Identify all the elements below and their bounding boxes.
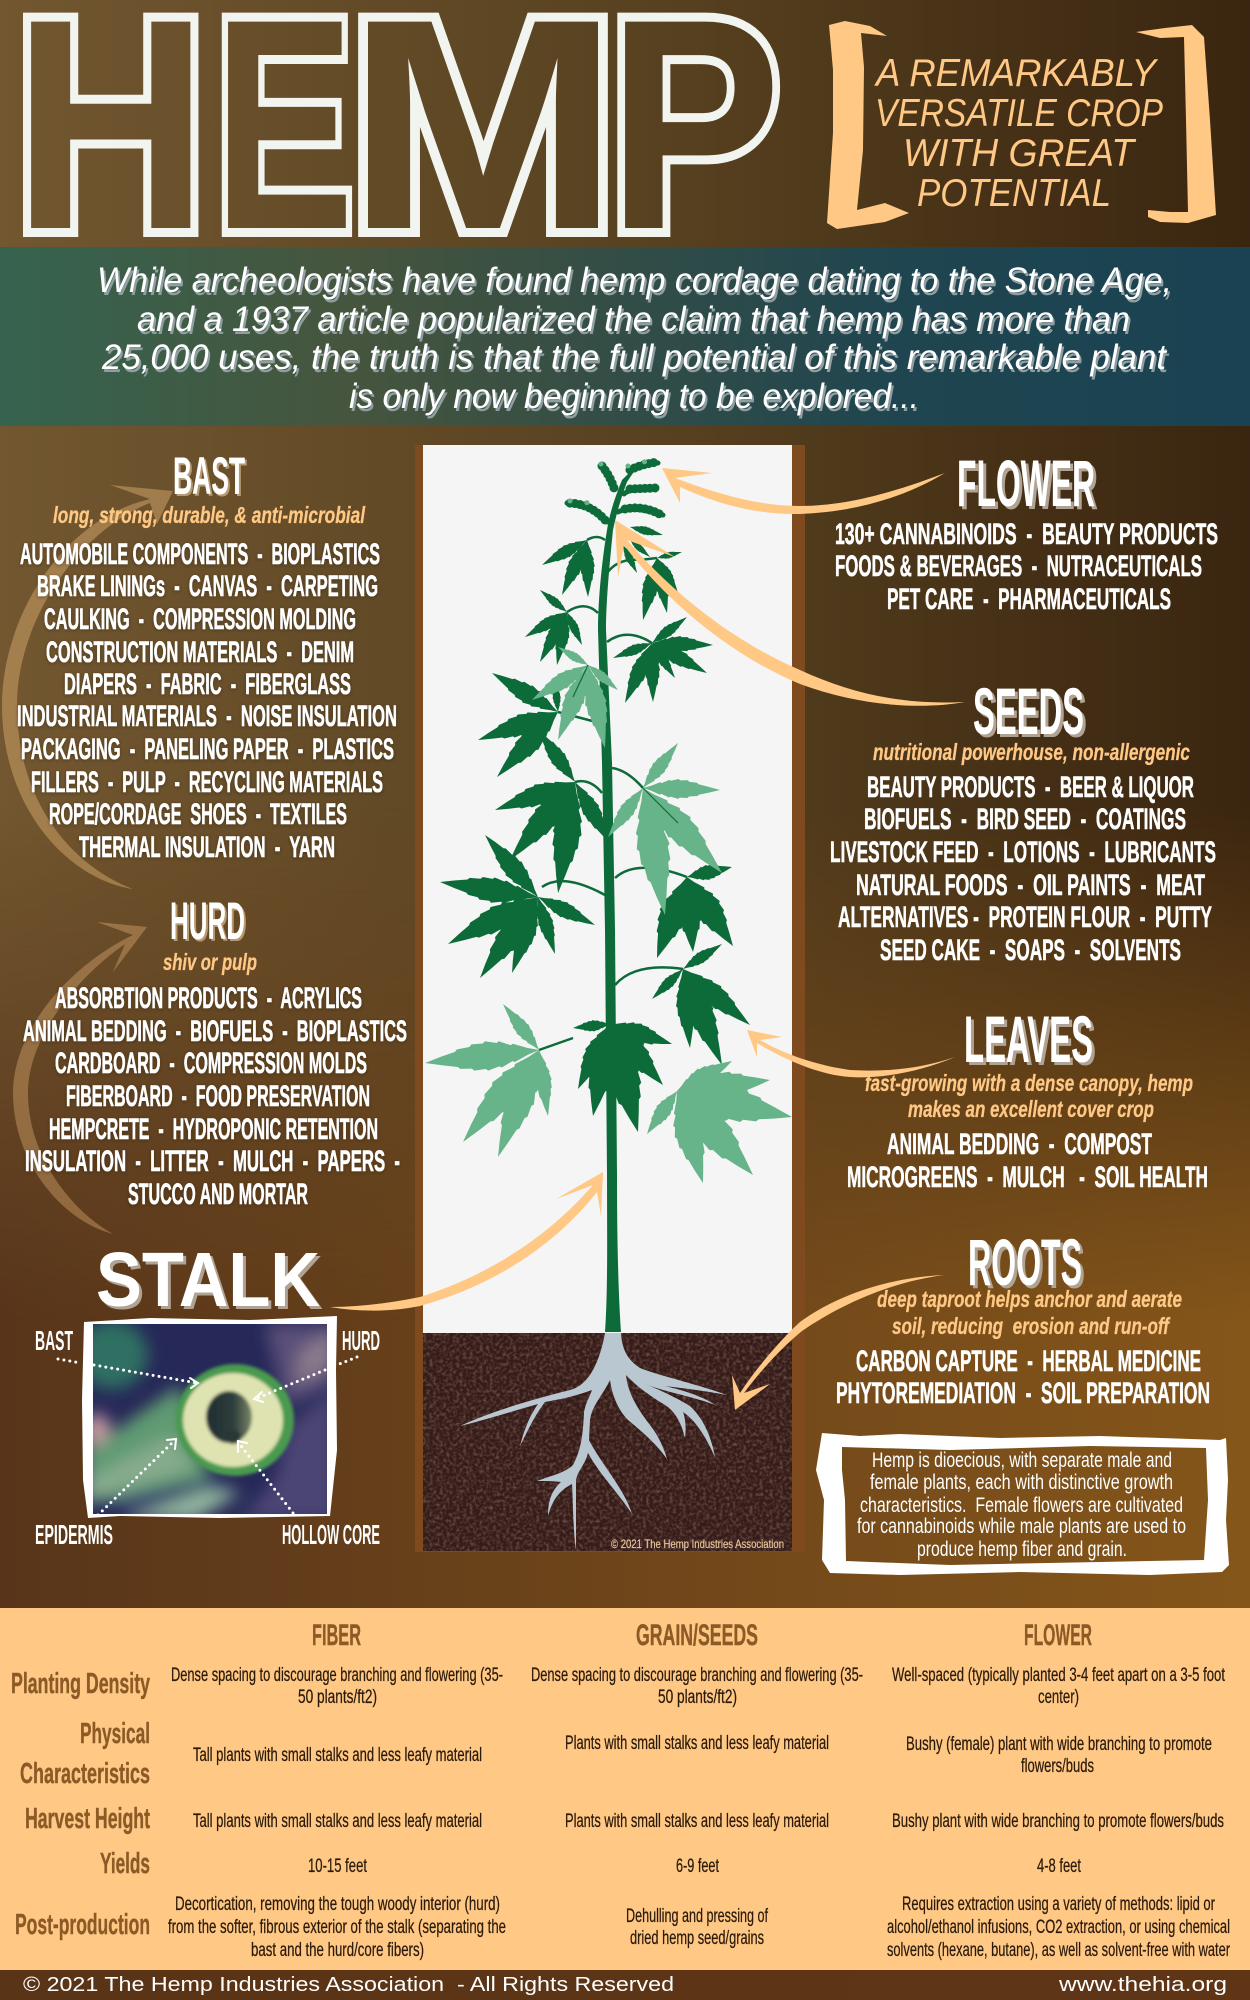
list: hurd uses: ANIMAL BEDDING - BIOFUELS - BIOPLASTICS (23, 1015, 407, 1048)
subtitle: roots (877, 1286, 1182, 1339)
stalk cross-section photo (93, 1324, 327, 1514)
footer bar (0, 1970, 1250, 2000)
arrow: hurd curve (13, 922, 147, 1234)
tagline: WITH GREAT (903, 132, 1137, 175)
panel: intro band (0, 247, 1250, 426)
list: flower uses (835, 518, 1218, 616)
intro text: While archeologists have found hemp cordage dating to the Stone Age, (97, 261, 1172, 300)
plant illustration (423, 460, 796, 1332)
tagline: POTENTIAL (917, 172, 1111, 215)
table row labels: Post-production (15, 1909, 150, 1941)
text: BAST (35, 1325, 73, 1356)
label: epidermis: EPIDERMIS (35, 1519, 113, 1550)
roots (460, 1333, 727, 1550)
table column: flower: 4-8 feet (1037, 1856, 1081, 1877)
table column: fiber: from the softer, fibrous exterior of the stalk (separating the (168, 1917, 506, 1938)
table column: fiber: Dense spacing to discourage branching and flowering (35- (171, 1665, 503, 1686)
list: hurd uses: HEMPCRETE - HYDROPONIC RETENTION (49, 1113, 378, 1146)
stalk photo frame (82, 1316, 337, 1518)
text: FLOWER (957, 446, 1095, 520)
table column: grain and seeds: 50 plants/ft2) (658, 1687, 737, 1708)
lower dark leaf on the stem (573, 1020, 672, 1132)
list: bast uses: FILLERS - PULP - RECYCLING MATERIALS (31, 766, 383, 799)
soil copyright: © 2021 The Hemp Industries Association (611, 1537, 784, 1551)
tagline: A REMARKABLY (874, 52, 1159, 95)
text: SEEDS (973, 674, 1084, 748)
table column: grain and seeds (531, 1665, 863, 1949)
list: bast uses: ROPE/CORDAGE SHOES - TEXTILES (49, 798, 347, 831)
subtitle: leaves (865, 1070, 1193, 1122)
list: bast uses: THERMAL INSULATION - YARN (79, 831, 335, 864)
heading: stalk: STALK (96, 1237, 320, 1323)
list: hurd uses: STUCCO AND MORTAR (128, 1178, 308, 1211)
list: bast uses: CAULKING - COMPRESSION MOLDING (44, 603, 356, 636)
table column headers: FIBER (312, 1619, 361, 1652)
table column: grain and seeds: Dense spacing to discourage branching and flowering (35- (531, 1665, 863, 1686)
list: bast uses: DIAPERS - FABRIC - FIBERGLASS (64, 668, 351, 701)
table row labels (11, 1668, 150, 1941)
tagline: VERSATILE CROP (875, 92, 1163, 135)
callout: dioecious note (816, 1433, 1229, 1575)
list: bast uses: AUTOMOBILE COMPONENTS - BIOPLASTICS (20, 538, 380, 571)
table column: fiber: 50 plants/ft2) (298, 1687, 377, 1708)
table column headers: GRAIN/SEEDS (636, 1619, 758, 1652)
table column: fiber: bast and the hurd/core fibers) (251, 1940, 424, 1961)
subtitle: hurd: shiv or pulp (163, 949, 257, 975)
table row labels: Characteristics (20, 1758, 150, 1790)
stalk pointers (58, 1357, 357, 1515)
callout: dioecious note: produce hemp fiber and grain. (917, 1538, 1127, 1561)
table column: flower: flowers/buds (1021, 1756, 1094, 1777)
light leaves (423, 643, 733, 1162)
list: hurd uses: CARDBOARD - COMPRESSION MOLDS (55, 1047, 367, 1080)
arrow: leaves (747, 1030, 955, 1077)
table column: grain and seeds: dried hemp seed/grains (630, 1928, 764, 1949)
list: bast uses: PACKAGING - PANELING PAPER - PLASTICS (21, 733, 394, 766)
subtitle: bast: long, strong, durable, & anti-microbial (53, 502, 365, 528)
arrow: stalk (330, 1172, 603, 1311)
text: LEAVES (964, 1002, 1093, 1076)
list: seeds uses (830, 771, 1216, 967)
table row labels: Planting Density (11, 1668, 150, 1700)
list: hurd uses: ABSORBTION PRODUCTS - ACRYLICS (55, 982, 362, 1015)
tagline (874, 52, 1163, 215)
text: HURD (342, 1325, 380, 1356)
flower buds (567, 460, 663, 522)
list: hurd uses: INSULATION - LITTER - MULCH - PAPERS - (25, 1145, 400, 1178)
intro text: and a 1937 article popularized the claim that hemp has more than (137, 300, 1130, 339)
table column headers: FLOWER (1024, 1619, 1092, 1652)
list: leaves uses (847, 1128, 1208, 1194)
title: HEMP (13, 0, 781, 292)
table column: grain and seeds: 6-9 feet (676, 1856, 719, 1877)
intro text: 25,000 uses, the truth is that the full potential of this remarkable plant (101, 338, 1167, 377)
arrow: seeds (615, 520, 965, 706)
bracket: right (1136, 25, 1216, 223)
subtitle: leaves: makes an excellent cover crop (908, 1096, 1154, 1122)
list: bast uses: BRAKE LININGs - CANVAS - CARPETING (37, 570, 378, 603)
dark leaves (438, 523, 757, 1070)
table column: flower (887, 1665, 1230, 1961)
intro text: is only now beginning to be explored... (349, 377, 919, 416)
table column: fiber: Tall plants with small stalks and less leafy material (193, 1811, 482, 1832)
text: BAST (173, 447, 245, 506)
footer bar: © 2021 The Hemp Industries Association - All Rights Reserved (23, 1974, 674, 1996)
table column: grain and seeds: Plants with small stalks and less leafy material (565, 1811, 829, 1832)
table column: fiber: 10-15 feet (308, 1856, 367, 1877)
soil (423, 1333, 792, 1551)
stems of leaves (539, 537, 687, 1050)
table column: fiber: Decortication, removing the tough woody interior (hurd) (175, 1894, 500, 1915)
arrow: roots (732, 1275, 944, 1410)
table column: grain and seeds: Dehulling and pressing of (626, 1906, 768, 1927)
text: HURD (170, 892, 245, 951)
footer bar: www.thehia.org (1058, 1974, 1227, 1996)
table column: grain and seeds: Plants with small stalks and less leafy material (565, 1733, 829, 1754)
bracket: left (827, 21, 909, 229)
list: hurd uses (23, 982, 407, 1211)
table row labels: Yields (100, 1848, 150, 1880)
panel: plant frame (415, 445, 805, 1552)
table column headers (312, 1619, 1092, 1652)
table column: fiber: Tall plants with small stalks and less leafy material (193, 1745, 482, 1766)
light leaf on the right (647, 1061, 792, 1183)
text: HOLLOW CORE (282, 1519, 380, 1550)
arrow: flower (662, 468, 945, 514)
table column: flower: center) (1038, 1687, 1079, 1708)
table row labels: Physical (80, 1718, 150, 1750)
main stem (598, 471, 633, 1332)
panel: comparison table (0, 1608, 1250, 1970)
leaf veins (573, 665, 678, 823)
list: bast uses: INDUSTRIAL MATERIALS - NOISE INSULATION (17, 700, 397, 733)
table row labels: Harvest Height (25, 1803, 150, 1835)
intro text (97, 261, 1172, 416)
list: bast uses (17, 538, 397, 864)
list: roots uses (836, 1345, 1210, 1410)
list: hurd uses: FIBERBOARD - FOOD PRESERVATION (66, 1080, 370, 1113)
arrow: bast curve (2, 485, 173, 889)
list: bast uses: CONSTRUCTION MATERIALS - DENIM (46, 636, 354, 669)
text: ROOTS (968, 1225, 1082, 1299)
table column: fiber (168, 1665, 506, 1961)
